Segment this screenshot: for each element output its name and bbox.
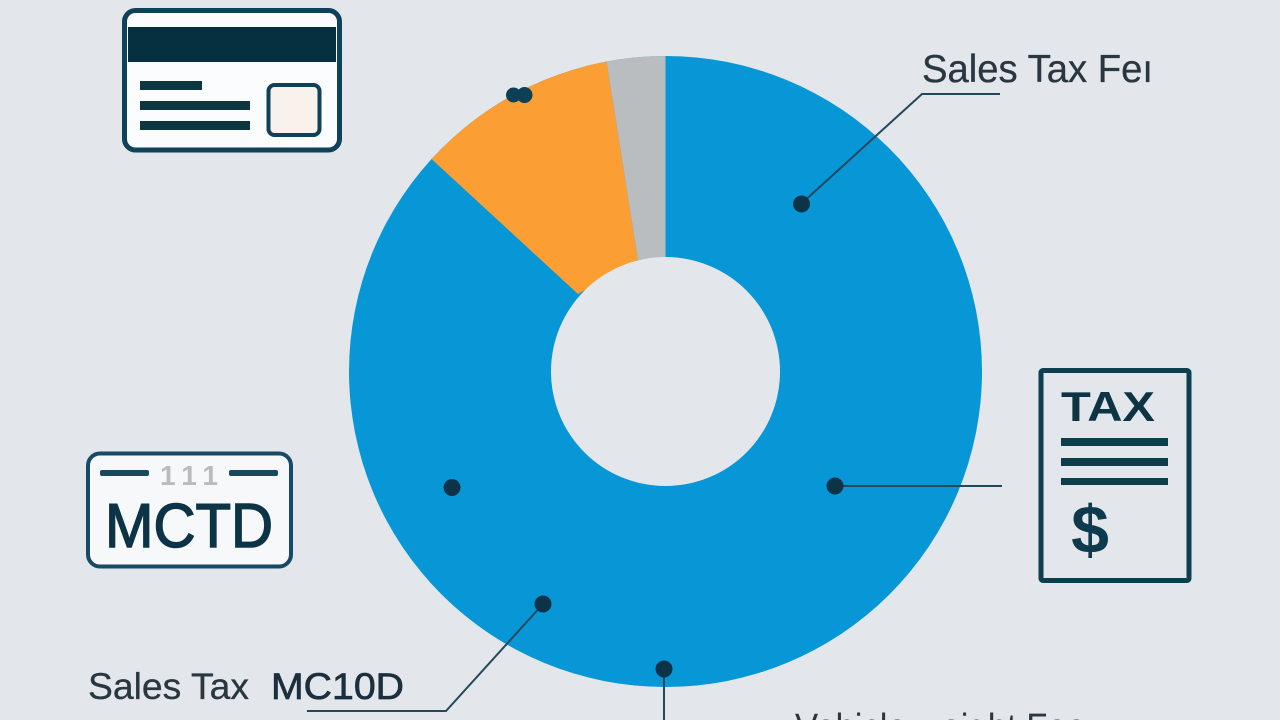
label: Sales Tax Fee (top right): Sales Tax Feı: [922, 48, 1153, 91]
donut hole: [551, 257, 780, 486]
callout: right leader line: [826, 478, 1002, 494]
marker: orange segment double dot: [506, 87, 532, 103]
marker: left dot: [444, 479, 460, 496]
icon: MCTD license plate: MCTD: [105, 492, 273, 561]
label: Sales Tax MCTD (bottom left): MC10D: [271, 666, 404, 707]
segment: blue main share: [349, 56, 982, 687]
callout: top right leader line: [793, 94, 1000, 212]
label: Sales Tax MCTD (bottom left): [88, 666, 404, 707]
label: Sales Tax MCTD (bottom left): Sales Tax: [88, 666, 249, 707]
icon: tax document: $: [1071, 492, 1109, 568]
icon: tax document: TAX: [1061, 383, 1155, 430]
segment: orange: [432, 62, 638, 294]
icon: MCTD license plate: [88, 454, 291, 566]
icon: credit card: [124, 10, 340, 150]
icon: tax document: [1041, 370, 1189, 580]
icon: MCTD license plate: 111: [160, 460, 218, 491]
callout: bottom left leader line: [307, 596, 552, 711]
donut chart: [349, 20, 982, 687]
callout: bottom center leader line: [656, 660, 672, 720]
segment: gray: [606, 56, 666, 260]
